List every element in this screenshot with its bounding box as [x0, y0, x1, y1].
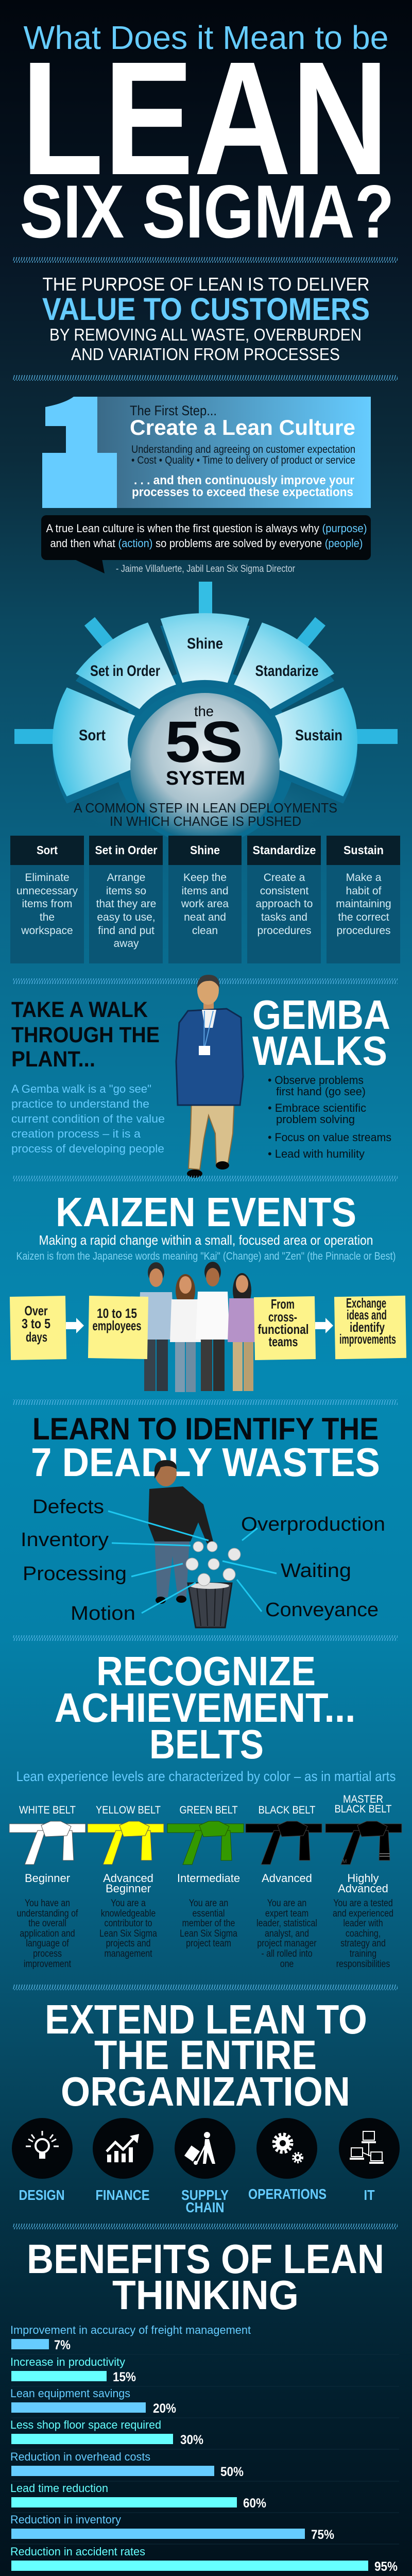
panel: 5S table: items so — [106, 885, 146, 897]
panel: 5S table: clean — [192, 925, 218, 937]
panel: sticky note 2 — [88, 1296, 148, 1359]
heading: take a walk: PLANT... — [11, 1047, 95, 1072]
panel: sticky note 1: Over — [25, 1303, 47, 1318]
panel: sticky note 2: employees — [93, 1318, 141, 1333]
bar chart: benefits: Reduction in inventory — [10, 2513, 121, 2526]
panel: sticky note 3 — [254, 1296, 316, 1360]
panel: 5S table: Eliminate — [25, 872, 70, 884]
panel: 5S table: approach to — [256, 898, 313, 910]
bar chart: benefits: 15% — [113, 2370, 136, 2384]
text block: belt descriptions: application and — [20, 1928, 75, 1939]
icon: operations gears — [256, 2118, 317, 2179]
text block: belt descriptions: the overall — [28, 1918, 66, 1928]
text block: improve: . . . and then continuously improve your — [134, 473, 354, 487]
text block: gemba bullets: • Lead with humility — [268, 1147, 365, 1160]
panel: sticky note 2: 10 to 15 — [97, 1306, 137, 1321]
text: department labels: DESIGN — [19, 2187, 65, 2203]
text block: belt descriptions: strategy and — [340, 1938, 386, 1948]
bar chart: benefits: Less shop floor space required — [10, 2418, 161, 2431]
purpose statement: AND VARIATION FROM PROCESSES — [71, 345, 340, 364]
panel: 5S table: items and — [181, 885, 229, 897]
panel: sticky note 1: days — [26, 1329, 47, 1345]
panel: sticky note 3: cross- — [268, 1309, 297, 1325]
text: department labels — [19, 2186, 375, 2215]
panel: belt titles: BLACK BELT — [335, 1803, 392, 1815]
text block: belt descriptions: leader, statistical — [256, 1918, 317, 1928]
text block: belt descriptions: improvement — [24, 1958, 71, 1969]
heading: gemba walks: GEMBA — [252, 992, 390, 1038]
panel: sticky note 1: 3 to 5 — [22, 1316, 50, 1331]
panel: 5S table: maintaining — [336, 898, 391, 910]
heading: extend lean: EXTEND LEAN TO — [45, 1996, 367, 2042]
text block: belt descriptions: You are a tested — [333, 1897, 393, 1908]
heading: recognize achievement belts — [55, 1648, 355, 1767]
panel: belt titles: BLACK BELT — [259, 1804, 316, 1816]
panel: 5S table: Sustain — [344, 843, 384, 857]
chart: 5S wheel: Set in Order — [90, 663, 160, 680]
text: belt levels: Beginner — [106, 1882, 151, 1895]
panel: 5S table: the correct — [338, 911, 389, 923]
text block: belt descriptions: analyst, and — [265, 1928, 309, 1939]
bar chart: benefits — [10, 2324, 399, 2574]
purpose statement: THE PURPOSE OF LEAN IS TO DELIVER — [42, 274, 370, 295]
text block: belt descriptions — [17, 1897, 393, 1969]
panel: 5S table: procedures — [336, 925, 391, 937]
heading: 7 deadly wastes — [31, 1412, 380, 1485]
chart: 5S wheel: Shine — [187, 635, 223, 652]
bar chart: benefits: Lead time reduction — [10, 2482, 108, 2495]
text block: gemba bullets — [268, 1074, 391, 1160]
text block: gemba bullets: • Observe problems — [268, 1074, 364, 1087]
text block: belt descriptions: You are an — [189, 1897, 228, 1908]
text block: belt descriptions: knowledgeable — [101, 1908, 156, 1919]
panel: 5S table: work area — [181, 898, 229, 910]
text: 5S caption: IN WHICH CHANGE IS PUSHED — [110, 814, 301, 829]
icon: gemba walker — [176, 975, 243, 1178]
panel: 5S table: consistent — [260, 885, 308, 897]
icon: black belt — [246, 1821, 322, 1865]
text block: belt descriptions: member of the — [182, 1918, 235, 1928]
panel: first step — [42, 397, 371, 508]
text: department labels: CHAIN — [185, 2199, 225, 2215]
heading: 7 deadly wastes: 7 DEADLY WASTES — [31, 1439, 380, 1485]
text block: belt descriptions: You are a — [111, 1897, 146, 1908]
panel: 5S table: easy to use, — [97, 911, 156, 923]
panel: belt titles: MASTER — [343, 1793, 383, 1805]
text: waste labels: Inventory — [21, 1529, 109, 1551]
icon: white belt — [9, 1821, 85, 1865]
bar chart: benefits: 30% — [180, 2433, 203, 2447]
heading: recognize achievement belts: ACHIEVEMENT... — [55, 1685, 355, 1731]
text: first step: The First Step... — [130, 403, 217, 418]
text block: belt descriptions: contributor to — [104, 1918, 152, 1928]
text: belt levels: Advanced — [262, 1872, 312, 1885]
panel: sticky note 1 — [10, 1296, 66, 1360]
bar chart: benefits: Increase in productivity — [10, 2355, 125, 2368]
panel: 5S table: tasks and — [261, 911, 307, 923]
text: waste labels: Conveyance — [265, 1599, 379, 1621]
panel: sticky note 3: teams — [269, 1334, 298, 1349]
text block: belt descriptions: leader with — [343, 1918, 383, 1928]
text: belt levels: Advanced — [103, 1872, 153, 1885]
text block: belt descriptions: language of — [26, 1938, 69, 1948]
chart: 5S wheel: the — [194, 703, 214, 719]
text: waste labels — [21, 1496, 385, 1624]
panel: sticky note 4 — [334, 1295, 406, 1359]
text: waste labels: Waiting — [281, 1560, 351, 1582]
icon: finance chart — [93, 2118, 153, 2179]
panel: 5S table: workspace — [21, 925, 73, 937]
text block: expectations — [131, 444, 355, 466]
purpose statement — [42, 274, 370, 364]
text block: belt descriptions: project manager — [257, 1938, 317, 1948]
text: department labels: OPERATIONS — [248, 2186, 327, 2202]
text block: belt descriptions: process — [33, 1948, 62, 1959]
panel: belt titles: GREEN BELT — [179, 1804, 238, 1816]
text block: belt descriptions: essential — [193, 1908, 225, 1919]
panel: 5S table: Set in Order — [95, 843, 158, 857]
heading: extend lean: ORGANIZATION — [61, 2069, 350, 2114]
bar chart: benefits: 60% — [243, 2496, 266, 2511]
panel: sticky note 3: From — [271, 1296, 295, 1312]
text: waste labels: Defects — [32, 1496, 104, 1518]
bar chart: benefits: 95% — [374, 2560, 398, 2574]
chart: 5S wheel: Sort — [79, 727, 106, 744]
text block: gemba bullets: • Focus on value streams — [268, 1131, 391, 1144]
heading: recognize achievement belts: BELTS — [149, 1721, 264, 1767]
text block: belt descriptions: project team — [186, 1938, 231, 1948]
purpose statement: VALUE TO CUSTOMERS — [42, 292, 370, 327]
panel: sticky note 3: functional — [258, 1321, 309, 1337]
icon: yellow belt — [88, 1821, 164, 1865]
text block: improve: processes to exceed these expectations — [132, 485, 353, 499]
text block: belt descriptions: Lean Six Sigma — [99, 1928, 157, 1939]
heading: extend lean: THE ENTIRE — [94, 2032, 317, 2078]
heading: benefits: THINKING — [112, 2272, 299, 2318]
text: 5S caption — [74, 800, 337, 829]
chart: 5S wheel — [14, 582, 398, 845]
bar chart: benefits: Reduction in overhead costs — [10, 2450, 150, 2463]
text: waste labels: Overproduction — [241, 1514, 385, 1535]
heading: take a walk — [11, 997, 160, 1072]
icon: kaizen team — [138, 1262, 259, 1392]
text: belt levels — [25, 1872, 388, 1895]
text: belt levels: Highly — [347, 1872, 379, 1885]
text block: gemba definition: process of developing people — [11, 1142, 164, 1155]
text block: belt descriptions: one — [280, 1958, 294, 1969]
heading: kaizen events: Making a rapid change within a small, focused area or operation — [39, 1232, 373, 1248]
text: waste labels: Motion — [71, 1603, 135, 1624]
heading: gemba walks: WALKS — [252, 1028, 387, 1074]
panel: 5S table: Keep the — [183, 872, 227, 884]
panel: 5S table: neat and — [184, 911, 226, 923]
text block: gemba definition: creation process – it is a — [11, 1127, 141, 1140]
panel: 5S table: Shine — [190, 843, 220, 857]
text: department labels: FINANCE — [96, 2187, 149, 2203]
callout: quote: A true Lean culture is when the first question is always why (purpose) — [46, 522, 367, 535]
text block: belt descriptions: You are an — [267, 1897, 306, 1908]
callout: quote — [41, 515, 371, 573]
heading: gemba walks — [252, 992, 390, 1074]
text block: belt descriptions: expert team — [265, 1908, 308, 1919]
chart: 5S wheel: 5S — [165, 709, 243, 774]
panel: sticky note 4: identify — [350, 1319, 385, 1335]
text block: belt descriptions: You have an — [25, 1897, 70, 1908]
heading: take a walk: TAKE A WALK — [11, 997, 148, 1022]
text block: belt descriptions: - all rolled into — [261, 1948, 313, 1959]
icon: master black belt — [325, 1821, 402, 1865]
text: belt levels: Advanced — [338, 1882, 388, 1895]
bar chart: benefits: 7% — [54, 2338, 71, 2352]
icon: master black belt: M — [342, 1859, 347, 1865]
text block: belt descriptions: responsibilities — [336, 1958, 390, 1969]
chart: 5S wheel: Standarize — [255, 663, 318, 680]
heading: kaizen events: KAIZEN EVENTS — [56, 1189, 356, 1235]
bar chart: benefits: 75% — [311, 2528, 334, 2542]
text block: belt descriptions: training — [350, 1948, 376, 1959]
heading: 7 deadly wastes: LEARN TO IDENTIFY THE — [32, 1412, 379, 1446]
panel: 5S table: procedures — [257, 925, 312, 937]
callout: quote: and then what (action) so problems are solved by everyone (people) — [50, 537, 363, 550]
text block: belt descriptions: understanding of — [17, 1908, 78, 1919]
text block: belt descriptions: coaching, — [346, 1928, 381, 1939]
text: 5S caption: A COMMON STEP IN LEAN DEPLOYMENTS — [74, 800, 337, 816]
text block: gemba definition: current condition of the value — [11, 1112, 165, 1125]
panel: sticky note 4: Exchange — [346, 1295, 386, 1311]
panel: belt titles: YELLOW BELT — [96, 1804, 161, 1816]
text block: gemba definition: A Gemba walk is a "go see" — [11, 1082, 151, 1095]
text: department labels: SUPPLY — [181, 2187, 229, 2203]
panel: 5S table: Arrange — [107, 872, 145, 884]
purpose statement: BY REMOVING ALL WASTE, OVERBURDEN — [49, 325, 362, 344]
icon: design lightbulb — [12, 2118, 73, 2179]
panel: 5S table: find and put — [98, 925, 154, 937]
icon: big number 1 — [42, 397, 117, 508]
connector lines — [108, 1511, 277, 1613]
panel: 5S table: that they are — [96, 898, 156, 910]
heading: kaizen events — [16, 1189, 396, 1262]
heading: take a walk: THROUGH THE — [11, 1023, 160, 1047]
text: belt levels: Intermediate — [177, 1872, 240, 1885]
icon: IT network — [339, 2118, 400, 2179]
arrow — [315, 1318, 333, 1333]
panel: 5S table: habit of — [346, 885, 382, 897]
panel: 5S table: Sort — [37, 843, 58, 857]
chart: 5S wheel: Sustain — [295, 727, 342, 744]
icon: green belt — [167, 1821, 244, 1865]
text block: gemba bullets: problem solving — [276, 1113, 355, 1126]
icon: waste basket — [186, 1541, 241, 1628]
text: department labels: IT — [364, 2187, 375, 2203]
bar chart: benefits: Lean equipment savings — [10, 2387, 130, 2400]
heading: extend lean — [45, 1996, 367, 2114]
panel: belt titles: WHITE BELT — [19, 1804, 76, 1816]
heading: benefits: BENEFITS OF LEAN — [27, 2236, 384, 2282]
heading: create a lean culture: Create a Lean Culture — [130, 415, 355, 439]
panel: 5S table: Make a — [346, 872, 382, 884]
text block: improve — [132, 473, 354, 499]
heading: recognize achievement belts: RECOGNIZE — [96, 1648, 316, 1694]
panel: 5S table: the — [40, 911, 55, 923]
icon: man throwing waste — [148, 1460, 213, 1604]
text block: belt descriptions: and experienced — [333, 1908, 393, 1919]
panel: belt titles — [19, 1793, 392, 1816]
bar chart: benefits: 50% — [220, 2465, 244, 2479]
text block: gemba bullets: • Embrace scientific — [268, 1101, 366, 1114]
heading: benefits — [27, 2236, 384, 2318]
text: quote attribution: - Jaime Villafuerte, Jabil Lean Six Sigma Director — [116, 564, 296, 574]
chart: 5S wheel: SYSTEM — [166, 768, 245, 789]
text block: gemba definition — [11, 1082, 165, 1155]
text block: expectations: Understanding and agreeing on customer expectation — [131, 444, 355, 455]
text block: expectations: • Cost • Quality • Time to delivery of product or service — [131, 454, 355, 466]
panel: 5S table: Standardize — [252, 843, 316, 857]
text: belt levels: Beginner — [25, 1872, 70, 1885]
panel: sticky note 4: ideas and — [347, 1307, 387, 1323]
title: What Does it Mean to be — [24, 19, 388, 56]
panel: 5S table: unnecessary — [16, 885, 78, 897]
text block: gemba bullets: first hand (go see) — [276, 1085, 366, 1098]
text block: gemba definition: practice to understand the — [11, 1097, 149, 1110]
bar chart: benefits: Improvement in accuracy of freight management — [10, 2324, 251, 2336]
text block: belt descriptions: management — [104, 1948, 152, 1959]
bar chart: benefits: 20% — [153, 2401, 176, 2416]
arrow — [66, 1318, 84, 1333]
icon: supply chain — [175, 2118, 235, 2179]
panel: 5S table: away — [113, 938, 139, 950]
text block: belt descriptions: Lean Six Sigma — [180, 1928, 237, 1939]
panel: 5S table — [10, 836, 400, 963]
panel: 5S table: items from — [22, 898, 73, 910]
text: waste labels: Processing — [23, 1563, 127, 1585]
bar chart: benefits: Reduction in accident rates — [10, 2545, 145, 2558]
text block: belt descriptions: projects and — [106, 1938, 150, 1948]
panel: 5S table: Create a — [264, 872, 305, 884]
